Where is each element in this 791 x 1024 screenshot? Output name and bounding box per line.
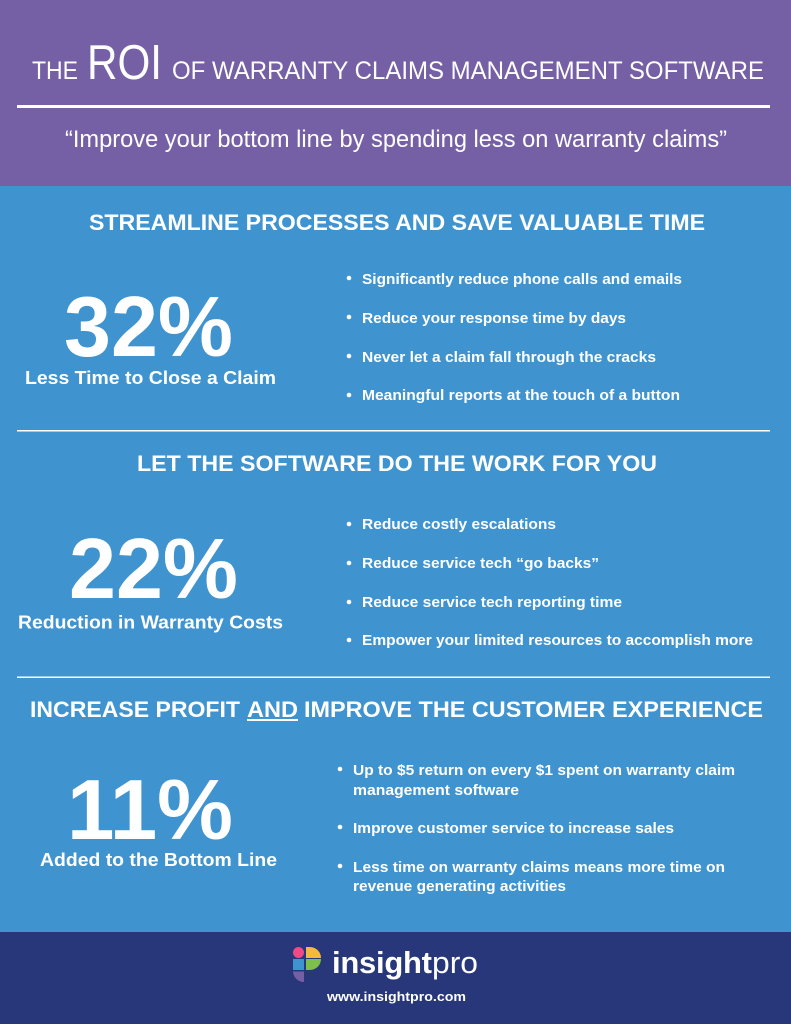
heading: INCREASE PROFIT	[30, 697, 241, 722]
heading: AND	[247, 697, 298, 722]
bullet list: Meaningful reports at the touch of a button	[362, 387, 680, 404]
bullet list	[338, 762, 735, 895]
heading: IMPROVE THE CUSTOMER EXPERIENCE	[304, 697, 763, 722]
stat label: Less Time to Close a Claim	[25, 368, 276, 388]
bullet list: revenue generating activities	[353, 878, 566, 895]
logo wordmark	[332, 945, 478, 980]
bullet list: Reduce costly escalations	[362, 516, 556, 533]
stat label: Added to the Bottom Line	[40, 850, 277, 870]
heading: STREAMLINE PROCESSES AND SAVE VALUABLE TIME	[89, 210, 705, 235]
subtitle quote: “Improve your bottom line by spending less on warranty claims”	[65, 126, 727, 153]
bullet list: Reduce service tech reporting time	[362, 594, 622, 611]
panel: increase profit	[30, 697, 763, 895]
title: OF WARRANTY CLAIMS MANAGEMENT SOFTWARE	[172, 57, 764, 85]
bullet list	[347, 271, 682, 404]
stat label: Reduction in Warranty Costs	[18, 612, 283, 632]
heading	[30, 697, 763, 722]
stat: 11%: 11%	[67, 763, 233, 858]
bullet list: Significantly reduce phone calls and emails	[362, 271, 682, 288]
bullet list: Empower your limited resources to accomplish more	[362, 632, 753, 649]
title: THE	[32, 57, 78, 85]
bullet list: Reduce service tech “go backs”	[362, 555, 599, 572]
bullet list: management software	[353, 782, 519, 799]
title	[32, 36, 764, 90]
bullet list: Improve customer service to increase sales	[353, 820, 674, 837]
bullet list: Never let a claim fall through the cracks	[362, 349, 656, 366]
heading: LET THE SOFTWARE DO THE WORK FOR YOU	[137, 451, 657, 476]
stat: 32%: 32%	[64, 280, 233, 375]
website url: www.insightpro.com	[326, 989, 466, 1004]
bullet list: Up to $5 return on every $1 spent on warranty claim	[353, 762, 735, 779]
logo wordmark: pro	[432, 945, 478, 980]
panel: streamline processes	[25, 210, 705, 404]
bullet list	[347, 516, 753, 649]
stat: 22%: 22%	[69, 522, 238, 617]
panel: let the software do the work	[18, 451, 753, 649]
title: ROI	[87, 36, 162, 90]
bullet list: Reduce your response time by days	[362, 310, 626, 327]
logo wordmark: insight	[332, 945, 432, 980]
panel: purple header	[0, 0, 791, 186]
bullet list: Less time on warranty claims means more time on	[353, 859, 725, 876]
icon: insightpro logo	[293, 947, 321, 982]
panel: footer	[0, 932, 791, 1024]
